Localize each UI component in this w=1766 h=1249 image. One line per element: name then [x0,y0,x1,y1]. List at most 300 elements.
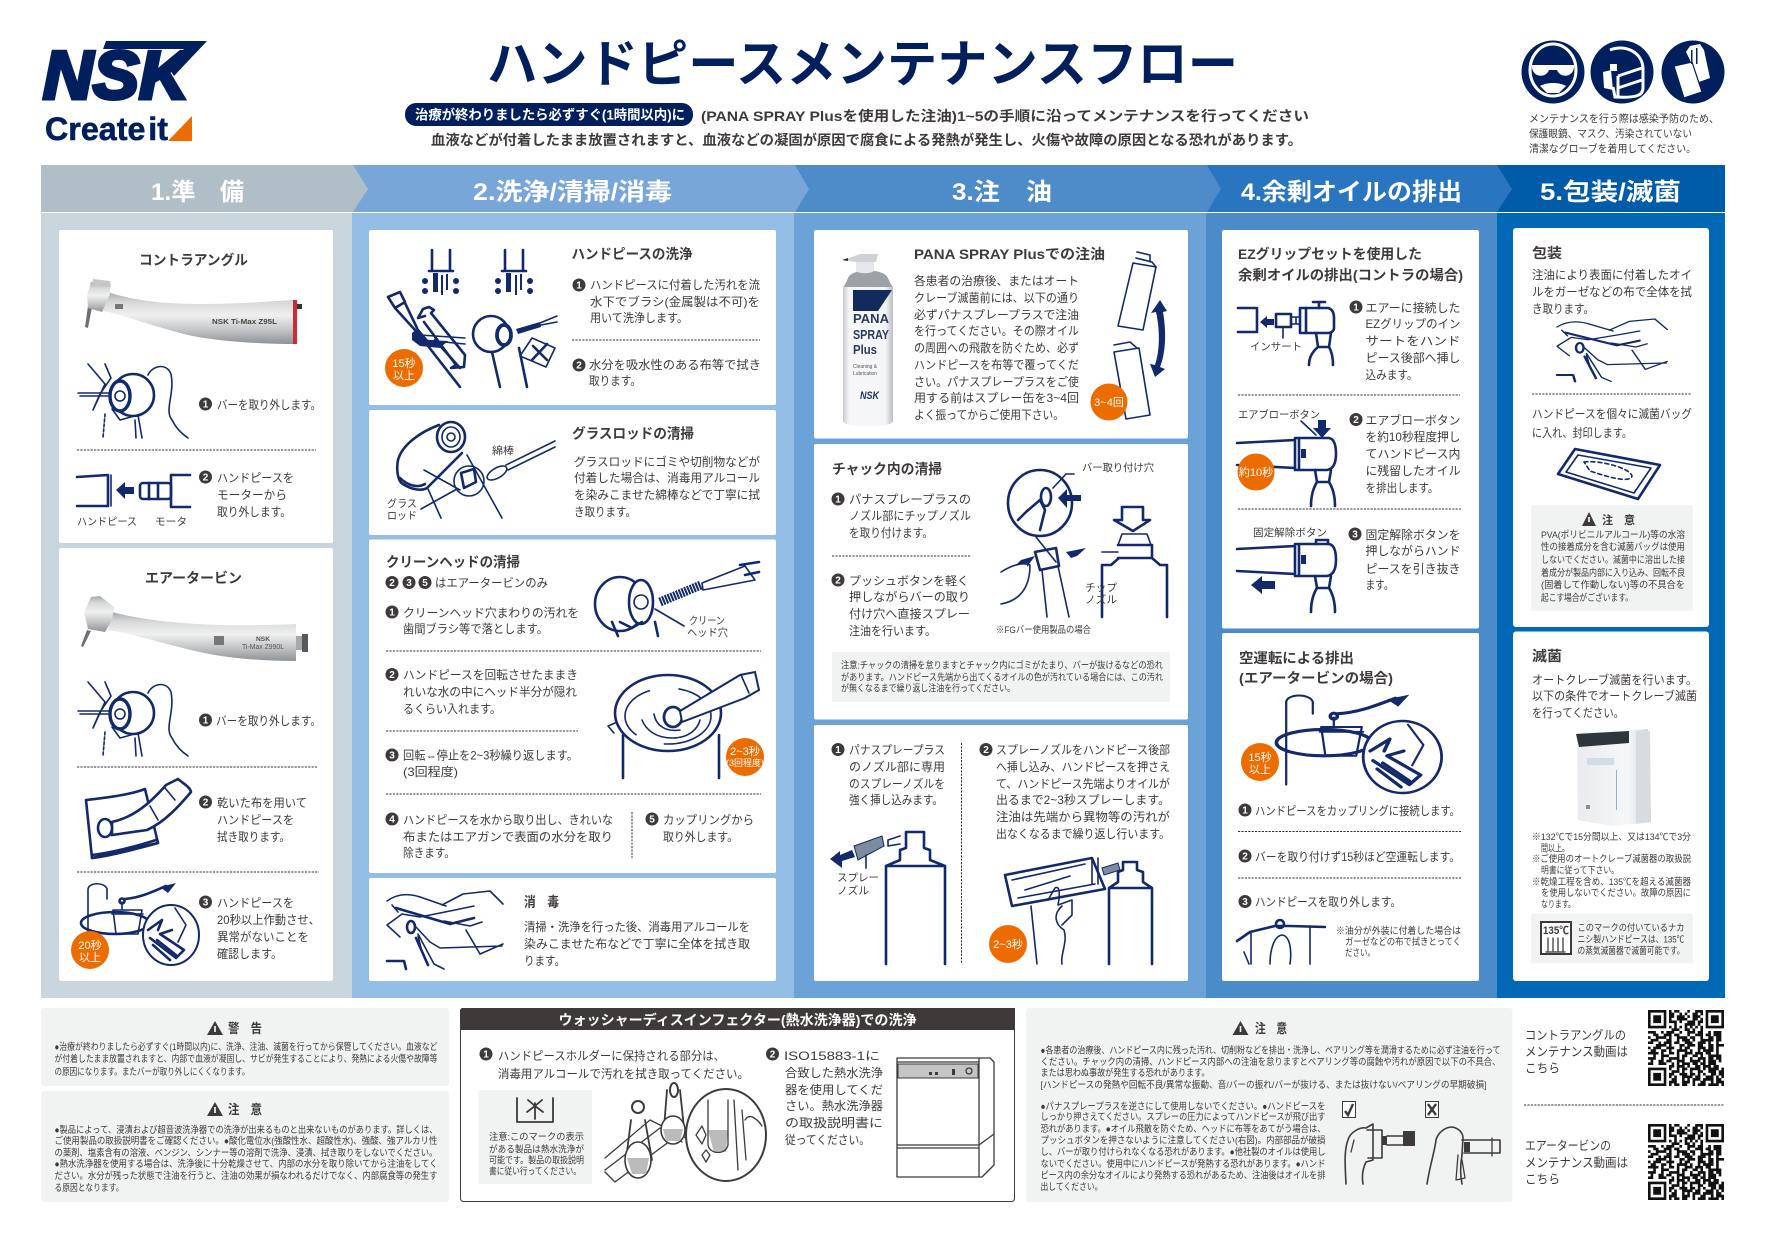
illustration: spray can: NSK [860,390,880,402]
body text: 用する前はスプレー缶を3~4回 [914,391,1079,405]
step 2: 2 [203,798,209,808]
lead text: (PANA SPRAY Plusを使用した注油)1~5の手順に沿ってメンテナンスを行ってください [701,108,1309,124]
step 2: 2 [983,745,989,756]
body text: を行ってください。 [1532,706,1624,720]
note: air turbine only [386,576,548,590]
illustration: air blow [1237,420,1336,506]
illustration: run in sink [81,883,199,965]
body text: 以下の条件でオートクレーブ滅菌 [1532,689,1697,703]
step 2: ハンドピースを [217,471,294,485]
step 1 [832,492,971,540]
text: air turbine video [1525,1139,1628,1186]
text: contra angle video: コントラアングルの [1525,1028,1626,1042]
step 2 [832,574,970,638]
step 2: ISO15883-1に [784,1049,880,1063]
illustration: release and pull [1237,540,1336,612]
mark text: このマークの付いているナカ [1578,923,1684,934]
panel: 包装 [1513,228,1709,627]
safety text: メンテナンスを行う際は感染予防のため、 [1529,112,1719,125]
illustration: clean head [595,562,759,636]
step 1: ノズル部にチップノズル [849,509,971,523]
note text: 可能です。製品の取扱説明 [489,1154,584,1166]
caution text: 起こす場合がございます。 [1541,592,1633,604]
safety text: 保護眼鏡、マスク、汚染されていない [1529,127,1692,140]
step 2: 2 [576,360,582,372]
illustration: remove bur [78,364,188,438]
step 2: プッシュボタンを軽く [849,574,969,588]
badge: 約10秒 [1238,454,1274,490]
label: spray nozzle: ノズル [837,884,869,897]
body text: オートクレーブ滅菌を行います。 [1532,673,1697,687]
illustration: autoclave [1576,729,1651,826]
banner 3 [790,165,1221,212]
step 5 [646,812,754,844]
heading: 消 毒 [524,894,559,910]
text: contra angle video: こちら [1525,1062,1560,1076]
body text [524,920,750,968]
text [54,1124,438,1194]
label: glass rod [387,497,417,522]
step 5: カップリングから [663,813,754,827]
step 4 [386,812,613,860]
badge: 約10秒: 約10秒 [1239,465,1273,479]
step 1: 1 [835,494,841,506]
illustration: wipe hands [1557,319,1667,381]
step 2: て、ハンドピース先端よりオイルが [996,777,1170,791]
grey note [478,1090,592,1184]
body text: を行ってください。その際オイル [914,324,1079,338]
step 1: バーを取り外します。 [216,714,321,728]
caution text: しないでください。滅菌中に溶出した接 [1541,554,1685,566]
conditions [1532,832,1691,910]
mark text: の蒸気滅菌器で滅菌可能です。 [1578,945,1684,957]
step 3 [386,748,578,779]
note [1336,925,1461,959]
step 1: のノズル部に専用 [849,760,945,774]
QR code 1 [1648,1010,1724,1086]
heading: EZグリップセットを使用した [1238,246,1422,262]
step 3: 3 [1242,897,1248,908]
step 4: ハンドピースを水から取り出し、きれいな [403,813,613,827]
illustration: run in sink [1276,695,1442,793]
step 1: ハンドピースホルダーに保持される部分は、 [498,1049,725,1063]
label: clean head hole [687,615,728,639]
label: glass rod: グラス [387,497,417,510]
step 2 [1350,413,1461,495]
text block 2: ●パナスプレープラスを逆さにして使用しないでください。●ハンドピースを [1040,1100,1326,1112]
panel: ハンドピースの洗浄 [369,230,776,405]
step 3: 回転⇔停止を2~3秒繰り返します。 [403,748,578,762]
text block 2: ピース内の余分なオイルにより発熱する恐れがあるため、注油後はオイルを排 [1040,1170,1326,1182]
heading: チャック内の清掃 [832,461,942,477]
banner 1: 1.準 備 [151,179,244,206]
column 3 panels [814,230,1188,981]
badge: 2~3秒: (3回程度) [726,757,764,768]
step 3: ハンドピースを [217,896,294,910]
text block 1: または思わぬ事故が発生する恐れがあります。 [1040,1067,1210,1079]
step 1: 込みます。 [1366,368,1418,382]
panel: caution right [1026,1008,1512,1202]
text block 2: プッシュボタンを押さないように注意してください(右図)。内部部品が破損 [1040,1134,1326,1146]
step 2: 取ります。 [589,374,641,388]
body text [574,455,760,519]
icon: check box [1342,1102,1356,1118]
note text: がある製品は熱水洗浄が [489,1144,584,1156]
body text: ハンドピースを布等で覆ってくだ [914,358,1079,372]
text: が付着したまま放置されますと、内部で血液が凝固し、サビが発生することにより、発熱による火傷や故障等 [54,1053,438,1065]
step 2: 器を使用してくだ [785,1083,883,1097]
label: air blow button: エアブローボタン [1238,408,1320,421]
footnote: ※FGバー使用製品の場合 [996,624,1091,636]
badge: 2~3秒: 2~3秒 [993,937,1023,951]
body text: 染みこませた布などで丁寧に全体を拭き取 [524,937,750,951]
text: ●製品によって、浸漬および超音波洗浄器での洗浄が出来るものと出来ないものがあります。詳しくは、 [54,1124,438,1136]
text [54,1041,438,1078]
note: ガーゼなどの布で拭きとってく [1345,936,1461,948]
badge: 20秒以上: 20秒 [78,938,102,952]
panel: 消毒 [369,878,776,981]
text: air turbine video: メンテナンス動画は [1525,1156,1628,1170]
panel: EZグリップ [1222,230,1479,628]
step 5: 取り外します。 [663,830,738,844]
column 2 panels [369,230,776,981]
panel: グラスロッドの清掃 [369,410,776,535]
badge: 15秒以上: 15秒 [1248,750,1272,764]
step 1: 1 [1242,806,1248,816]
note text [489,1131,584,1178]
badge: 2~3秒 [989,925,1027,963]
step 5: 5 [649,814,655,826]
caution text [1541,529,1685,604]
heading: グラスロッドの清掃 [572,426,694,442]
note: ださい。 [1345,948,1375,959]
icon: mask [1590,40,1654,104]
handpiece photo: air turbine: Ti-Max Z990L [242,644,284,651]
icon: goggles [1522,40,1584,104]
column 5 panels [1513,228,1709,981]
icon: thermal wash mark [517,1098,553,1122]
note: air turbine only: 2 [389,578,395,589]
step 1: 1 [203,716,209,726]
body text: 必ずパナスプレープラスで注油 [914,308,1079,322]
label: clean head hole: ヘッド穴 [687,627,728,639]
heading [1239,650,1393,686]
text: contra angle video [1525,1028,1628,1076]
step 2 [386,668,578,716]
illustration: spray can: SPRAY [853,327,889,342]
illustration: wipe off oil [1237,920,1325,964]
column 4 panels [1222,230,1479,981]
step 1: 水下でブラシ(金属製は不可)を [590,295,760,309]
body text [1532,268,1692,316]
header bar [460,1008,1015,1030]
badge: 15秒以上: 以上 [393,369,415,382]
body text: さい。パナスプレープラスをご使 [914,375,1079,389]
text block 1 [1040,1044,1500,1091]
step 1 [480,1048,749,1081]
body text [1532,673,1697,720]
body text: き取ります。 [574,505,636,519]
step 1: を取り付けます。 [849,526,933,540]
step 3: ハンドピースを取り外します。 [1255,895,1401,909]
body text: sterilization bag: に入れ、封印します。 [1532,426,1632,440]
step 2: に残留したオイル [1366,464,1461,478]
label: spray nozzle [837,872,879,897]
step 1: パナスプレープラスの [849,492,971,506]
caution heading: 注 意 [1602,513,1635,527]
step 3: 20秒以上作動させ、 [217,913,320,927]
step 1: 歯間ブラシ等で落とします。 [403,622,548,636]
step 1: 1 [389,608,395,618]
illustration: nozzle insert [830,832,945,964]
heading: エアータービン [145,570,242,586]
column 1 panels [59,230,333,981]
illustration: remove bur [78,682,188,756]
badge: 2~3秒 [726,738,764,776]
step 2: 合致した熱水洗浄 [785,1066,883,1080]
step banners [41,165,1725,212]
conditions: 間以上。 [1541,844,1569,854]
heading: 余剰オイルの排出(コントラの場合) [1238,267,1463,283]
body text: 付着した場合は、消毒用アルコール [574,471,760,485]
text: ださい。水分が残った状態で注油を行うと、注油の効果が損なわれるだけでなく、内部腐食等の発生す [54,1170,438,1182]
safety icons [1522,40,1724,155]
banner 1 [41,165,368,212]
body text: ります。 [524,954,565,968]
note text: 書に従い行ってください。 [489,1166,581,1178]
label: motor: モータ [155,516,187,528]
caution text: 着成分が製品内部に入り込み、回転不良 [1541,567,1685,579]
step 3 [1348,528,1460,592]
conditions: ※ご使用のオートクレーブ滅菌器の取扱説 [1532,853,1691,865]
step 4: 布またはエアガンで表面の水分を取り [403,830,613,844]
icon: warning [1232,1021,1248,1035]
text: ●治療が終わりましたら必ずすぐ(1時間以内)に、洗浄、注油、滅菌を行ってから保管してください。血液など [54,1041,438,1053]
illustration: incorrect hold [1427,1127,1500,1184]
logo: NSK Create it [43,38,207,147]
step 2: を約10秒程度押し [1366,430,1460,444]
badge: 15秒以上: 以上 [1249,763,1271,776]
panel: caution left [41,1091,449,1202]
step 2: 乾いた布を用いて [217,796,307,810]
title: ハンドピースメンテナンスフロー [487,36,1238,93]
illustration: spray can: PANA [853,311,890,326]
panel: チャック内の清掃 [814,444,1188,720]
note: air turbine only: 5 [422,578,428,589]
logo: NSK Create it: Create it [45,111,168,147]
logo: NSK Create it: NSK [43,38,194,114]
panel: video QR codes [1524,1010,1724,1200]
badge: 15秒以上 [385,349,423,387]
lead text [405,103,1309,148]
step 2 [199,796,307,844]
step 4: 4 [389,814,395,826]
step 3: 固定解除ボタンを [1366,528,1460,542]
icon: warning [1582,512,1596,526]
illustration: handpiece holder [605,1083,766,1182]
badge: 2~3秒: 2~3秒 [730,744,760,758]
135℃ mark box [1531,914,1693,964]
panel: エアータービン [59,548,333,981]
body text: 清掃・洗浄を行った後、消毒用アルコールを [524,920,750,934]
body text: の周囲への飛散を防ぐため、必ず [914,341,1079,355]
column backgrounds [41,213,1725,998]
conditions: 明書に従って下さい。 [1541,864,1619,876]
step 1: サートをハンド [1366,334,1460,348]
handpiece photo: contra angle [85,279,302,344]
step 2: スプレーノズルをハンドピース後部 [996,743,1170,757]
heading: 包装 [1532,245,1562,261]
text: contra angle video: メンテナンス動画は [1525,1045,1628,1059]
text: る原因となります。 [54,1183,124,1194]
icon: gloves [1662,40,1724,104]
step 2: エアブローボタン [1366,414,1460,428]
illustration: spraying into handpiece [1005,858,1152,964]
step 2: 2 [770,1050,776,1060]
icon: warning [207,1021,223,1035]
text block 2: 出してください。 [1040,1181,1102,1193]
step 2: の取扱説明書に [785,1116,883,1130]
step 3 [199,896,320,961]
note: air turbine only: 3 [406,578,412,589]
step 1: バーを取り外します。 [217,398,321,412]
caution box [1531,505,1693,611]
heading: ハンドピースの洗浄 [572,246,692,262]
banner 4: 4.余剰オイルの排出 [1241,179,1462,206]
step 2: 拭き取ります。 [217,830,290,844]
step 1: 1 [1353,302,1359,314]
step 1: エアーに接続した [1366,301,1460,315]
icon: 135℃ mark: 135℃ [1543,925,1569,937]
QR code 2 [1648,1124,1724,1200]
step 1: 消毒用アルコールで汚れを拭き取ってください。 [498,1067,749,1081]
text block 2: し、バーが取り付けられなくなる恐れがあります。●他社製のオイルは使用し [1040,1146,1326,1158]
banner 2: 2.洗浄/清掃/消毒 [473,179,672,206]
step 4: 除きます。 [403,846,455,860]
body text: を染みこませた綿棒などで丁寧に拭 [574,488,760,502]
panel: 空運転による排出 [1222,633,1479,981]
step 1: ハンドピースに付着した汚れを流 [590,278,760,292]
step 1 [832,743,945,807]
label: spray nozzle: スプレー [837,872,879,884]
panel: washer disinfector [460,1008,1015,1202]
illustration: EZ grip insert [1238,302,1334,365]
label: cotton swab: 綿棒 [492,444,515,457]
caution text: (固着して作動しない)等の不具合を [1541,579,1685,591]
icon: cross box [1426,1102,1438,1118]
panel: warning [41,1008,449,1086]
step 2: ハンドピースを回転させたままき [403,668,578,682]
illustration: head in water [608,672,759,778]
mark text [1578,923,1685,957]
step 2 [572,358,761,388]
heading: 注 意 [1255,1021,1287,1036]
step 3: (3回程度) [403,765,458,779]
illustration: chuck spray [1001,470,1167,617]
illustration: bag [1558,449,1660,499]
label: chip nozzle: ノズル [1085,593,1117,606]
conditions: を使用しないでください。故障の原因に [1541,887,1691,899]
label: handpiece: ハンドピース [77,516,137,528]
step 2: 2 [835,576,841,586]
step 1: ハンドピースをカップリングに接続します。 [1255,804,1460,818]
caution text: PVA(ポリビニルアルコール)等の水溶 [1541,529,1685,541]
label: clean head hole: クリーン [689,615,725,627]
body text [914,274,1079,422]
banner 2 [350,165,809,212]
body text: 各患者の治療後、またはオート [914,274,1079,288]
illustration: washer machine [897,1058,994,1177]
note text: 注意:このマークの表示 [489,1131,584,1143]
note box: 注意:チャックの清掃を怠りますとチャック内にゴミがたまり、バーが抜けるなどの恐れ [841,660,1163,672]
step 1: 用いて洗浄します。 [590,311,688,325]
step 2 [980,743,1170,841]
text: air turbine video: こちら [1525,1172,1560,1186]
illustration: spray can [842,254,893,426]
conditions: ※乾燥工程を含め、135℃を超える滅菌器 [1532,876,1691,888]
mark text: ニシ製ハンドピースは、135℃ [1578,934,1685,946]
heading: クリーンヘッドの清掃 [386,554,520,570]
label: glass rod: ロッド [387,510,417,522]
illustration: spray can: Cleaning & [853,364,878,370]
banner 4 [1200,165,1512,212]
step 2: 取り外します。 [217,505,291,519]
text: の原因になります。またバーが取り外しにくくなります。 [54,1066,250,1078]
step 2: モーターから [217,488,287,502]
text block 1: [ハンドピースの発熱や回転不良/異常な振動、音/バーの振れ/バーが抜ける、または抜けない/ベアリングの早期破損] [1040,1079,1486,1091]
step 2: るくらい入れます。 [403,702,501,716]
step 3: 異常がないことを [217,930,309,944]
step 3: 3 [1352,530,1358,540]
lead text: 治療が終わりましたら必ずすぐ(1時間以内)に [415,106,685,122]
panel: クリーンヘッドの清掃 [369,540,776,873]
text: air turbine video: エアータービンの [1525,1139,1611,1153]
label: chip nozzle: チップ [1085,582,1118,594]
heading: 空運転による排出 [1239,650,1354,666]
step 2: 注油を行います。 [849,624,936,638]
badge: 20秒以上: 以上 [79,951,101,964]
heading: コントラアングル [139,252,248,268]
note box [832,652,1170,702]
step 1: 強く挿し込みます。 [849,793,943,807]
label: chip nozzle [1085,582,1118,606]
step 1: 1 [576,280,582,292]
step 3: ピースを引き抜き [1366,562,1460,576]
step 2: 2 [203,472,209,484]
heading: 警 告 [228,1021,262,1036]
conditions: なります。 [1541,900,1575,910]
step 1: 1 [483,1050,489,1060]
step 2 [199,470,294,519]
illustration: spray can: Plus [853,342,877,357]
step 2: 従ってください。 [785,1133,870,1147]
icon: warning [207,1102,223,1116]
badge: 20秒以上 [71,931,109,969]
badge: 3~4回 [1090,384,1128,420]
step 3: 3 [203,898,209,908]
handpiece photo: contra angle: NSK Ti-Max Z95L [212,319,278,326]
text block 1: ください。チャック内の清掃、ハンドピース内部への注油を怠りますとベアリング等の腐蝕や汚れが原因で以下の不具合、 [1040,1056,1500,1068]
step 2: 付け穴へ直接スプレー [849,607,970,621]
step 2: バーを取り付けず15秒ほど空運転します。 [1255,850,1460,864]
illustration: spray can: Lubrication [853,371,877,377]
label: lock release button: 固定解除ボタン [1253,526,1327,539]
step 1: のスプレーノズルを [849,777,945,791]
step 1: 1 [203,400,209,410]
step 2: 出るまで2~3秒スプレーします。 [996,793,1170,807]
body text: グラスロッドにゴミや切削物などが [574,455,760,469]
step 2: 水分を吸水性のある布等で拭き [589,358,761,372]
